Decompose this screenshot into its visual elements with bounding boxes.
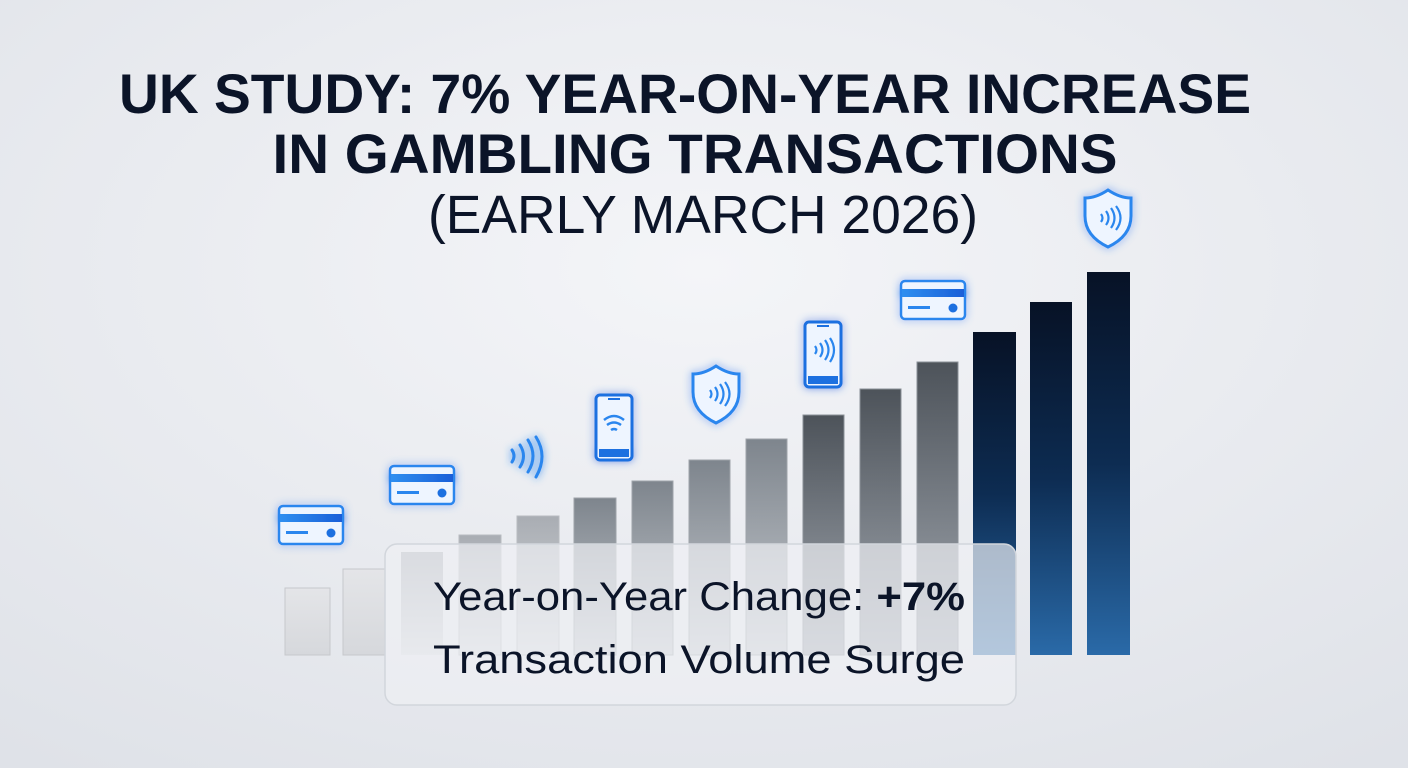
title: (EARLY MARCH 2026) [428,185,978,245]
callout text [433,575,965,682]
title [119,62,1251,245]
bar chart [285,272,1130,655]
icon: shield 1 [693,366,739,423]
icon: contactless waves [512,437,542,477]
icon: phone 2 [805,322,841,387]
icon: card 1 [279,506,343,544]
title: IN GAMBLING TRANSACTIONS [272,122,1118,185]
title: UK STUDY: 7% YEAR-ON-YEAR INCREASE [119,62,1251,125]
callout text: Transaction Volume Surge [433,638,965,682]
callout panel [385,544,1016,705]
icon: card 2 [390,466,454,504]
icon: card 3 [901,281,965,319]
icon: phone 1 [596,395,632,460]
callout text: Year-on-Year Change: +7% [433,575,965,619]
icon: shield 2 [1085,190,1131,247]
